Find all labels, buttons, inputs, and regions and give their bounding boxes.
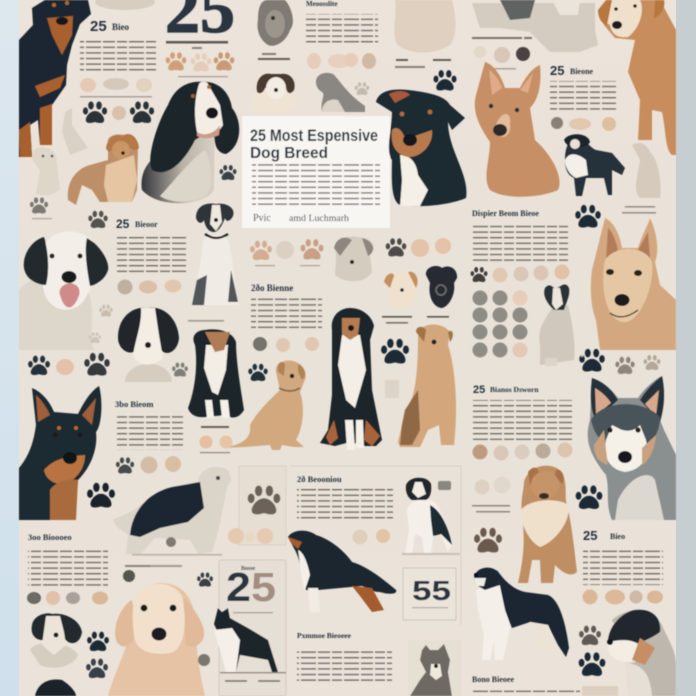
sitting black and white dog — [192, 204, 240, 305]
heading: 25 Bieoor: Bieoor — [135, 220, 158, 229]
panel: calendar 25 card: 25 — [226, 564, 276, 610]
cream dog head — [384, 271, 418, 308]
dark paw — [87, 483, 115, 508]
fluffy chow dog — [518, 466, 577, 583]
dark dog peeking at bottom — [35, 680, 76, 696]
paw swatches row — [551, 117, 616, 131]
black and white fluffy head — [118, 308, 179, 382]
heading: 25 Bieo: Bieo — [112, 22, 129, 32]
spaniel — [142, 82, 239, 203]
heading: 25 Bianos: 25 — [473, 384, 485, 396]
text block — [80, 37, 156, 72]
fluffy white dog — [632, 143, 661, 198]
heading: 25 Bieoor: 25 — [116, 217, 130, 231]
text block — [472, 225, 568, 261]
title card: amd Luchmarh — [289, 214, 349, 224]
ring glyph — [438, 481, 451, 490]
heading: Bono Bieoee: Bono Bieoee — [472, 675, 514, 684]
heading: top column: Meoosslite — [306, 0, 338, 8]
rule under small dog — [402, 553, 460, 555]
panel outline: breed card — [290, 466, 461, 625]
ring glyph — [198, 654, 210, 666]
brown fluffy dog — [68, 134, 139, 205]
text block — [251, 296, 322, 332]
panel: 55 card: 55 — [412, 575, 451, 606]
fur swatch bottom — [582, 686, 618, 696]
speckled grey dog — [257, 0, 293, 46]
paw row: dark and tan — [83, 102, 154, 123]
text block — [472, 689, 580, 696]
title card — [242, 116, 390, 228]
heading: 25 Bieo: 25 — [583, 528, 597, 543]
paw swatches row — [386, 238, 451, 257]
title line one: 25 Most Espensive — [250, 126, 378, 145]
rule under small collie — [220, 672, 286, 673]
sketchy grey dogs, top — [472, 0, 598, 52]
paw swatches row — [80, 78, 152, 98]
small white and brown dog — [252, 74, 296, 113]
text block — [473, 400, 572, 440]
tricolor small dog — [564, 134, 625, 196]
paw row under sheepdog — [28, 353, 110, 376]
heading: 2ð Bienne: Bieone — [570, 67, 594, 76]
text block — [28, 549, 108, 586]
title line two: Dog Breed — [250, 145, 328, 162]
tan sitting dog — [398, 324, 456, 447]
black dog head — [426, 266, 457, 308]
tall Bernese — [320, 308, 382, 450]
paw stack — [86, 632, 109, 678]
top-left rottweiler — [19, 0, 91, 157]
black and tan dog head — [376, 90, 466, 206]
golden sitting dog — [222, 360, 306, 450]
sketch swatches — [545, 355, 583, 366]
dark grey paw — [88, 211, 108, 228]
blue-grey dog head — [588, 376, 676, 520]
heading: 25 Bieo — [90, 18, 129, 35]
paw swatches row — [472, 442, 572, 460]
paw sketch — [99, 305, 113, 316]
long Bernese — [288, 531, 396, 613]
big tan shepherd — [591, 218, 676, 350]
paw swatches row — [307, 53, 376, 69]
small sitting grey dog — [539, 284, 575, 365]
heading: 3bo Bioooeo: 3oo Bioooeo — [28, 532, 72, 542]
text block — [306, 14, 378, 45]
bulldog style head — [30, 613, 82, 668]
text block — [115, 412, 183, 450]
rule under sheepdog — [132, 554, 222, 556]
paw swatches row — [253, 337, 319, 352]
pale paw with rule — [30, 197, 52, 219]
card footer: Pvic — [253, 213, 271, 224]
text block — [583, 549, 663, 585]
panel: 55 card — [403, 568, 456, 620]
heading: Pxmmoe: Pxmmoe Bieoeee — [297, 631, 352, 640]
border collie — [474, 568, 569, 660]
text block — [297, 650, 392, 684]
small black and white dog — [405, 478, 452, 554]
paw swatches row: middle card — [250, 239, 323, 266]
text fragment — [225, 680, 280, 682]
small grey dog — [316, 73, 365, 112]
dark paw — [575, 205, 601, 228]
pink swatches — [200, 426, 232, 453]
heading: 25 Bianos: Bianos Dsworn — [490, 385, 539, 394]
paw swatches row — [166, 52, 234, 77]
bottom grey dog — [408, 640, 461, 696]
fur swatch at top — [95, 0, 155, 10]
pale paw — [355, 82, 369, 95]
heading: 25 Bieoor — [116, 217, 158, 231]
paw swatches row — [116, 456, 181, 474]
big white sheepdog — [19, 232, 108, 350]
heading: 3bo Bieom: 3bo Bieom — [115, 399, 154, 409]
circle swatch grid — [472, 290, 528, 358]
large fur patch, top centre — [394, 0, 456, 52]
heading: 25 Bieo: Bieo — [610, 532, 625, 541]
large golden retriever — [108, 583, 205, 696]
text fragment under grey dog — [258, 53, 290, 60]
paw row above blue-grey dog — [579, 349, 660, 374]
sitting Bernese — [188, 329, 244, 418]
small collie in card — [214, 608, 278, 672]
caption — [166, 41, 228, 49]
heading: 25 Bianos — [473, 384, 539, 396]
rule — [188, 320, 224, 322]
paw sketch grey — [172, 363, 188, 376]
sketch glyph — [385, 380, 399, 398]
paw sketch — [89, 332, 101, 343]
heading: 2ð Bienne — [550, 63, 594, 78]
old english sheepdog — [113, 467, 231, 555]
text fragment bottom of fluffy dog — [622, 206, 656, 214]
dark paw — [434, 70, 456, 90]
panel: paw card — [228, 466, 286, 545]
text fragment — [395, 59, 451, 68]
text block — [116, 236, 186, 275]
heading: Dispier Beom: Dispier Beom Bieoe — [472, 209, 539, 218]
sketch swatches — [472, 476, 510, 512]
paw swatches row — [27, 591, 108, 605]
brown paw — [474, 528, 502, 552]
dark paw — [576, 485, 602, 509]
paw stack — [579, 626, 605, 676]
panel: calendar 25 card: Bosse — [241, 566, 256, 572]
grey cream dog head — [334, 236, 374, 281]
text block — [550, 81, 616, 113]
rust shepherd head — [475, 62, 560, 197]
paw swatches row — [118, 280, 182, 294]
small ring glyph — [166, 537, 176, 547]
small white dog — [32, 147, 60, 196]
small paw — [220, 165, 236, 180]
left shepherd black and tan — [19, 386, 101, 520]
heading row with swatches, top right column — [472, 37, 532, 70]
text fragment — [382, 316, 449, 324]
collie head, bottom right — [607, 610, 676, 696]
top-right golden dog — [598, 0, 676, 155]
panel: calendar 25 card — [219, 560, 286, 696]
dark paw — [381, 339, 409, 364]
heading: 2ð Bienne: 25 — [550, 63, 564, 78]
paw swatches near calendar — [123, 565, 213, 586]
paw swatches row — [352, 529, 390, 544]
card body text — [252, 163, 380, 205]
heading: 25 Bieo — [583, 528, 625, 543]
heading: 25 Bieo: 25 — [90, 18, 107, 35]
heading: 2ðo Bienne: 2ðo Bienne — [251, 283, 293, 293]
heading: 2ð Beooniou: 2ð Beooniou — [297, 474, 342, 484]
dark paw below — [248, 364, 268, 381]
sketch dog outline — [62, 108, 88, 155]
paw swatches row — [471, 264, 570, 282]
text block — [297, 487, 393, 521]
paw swatches row — [582, 590, 663, 604]
